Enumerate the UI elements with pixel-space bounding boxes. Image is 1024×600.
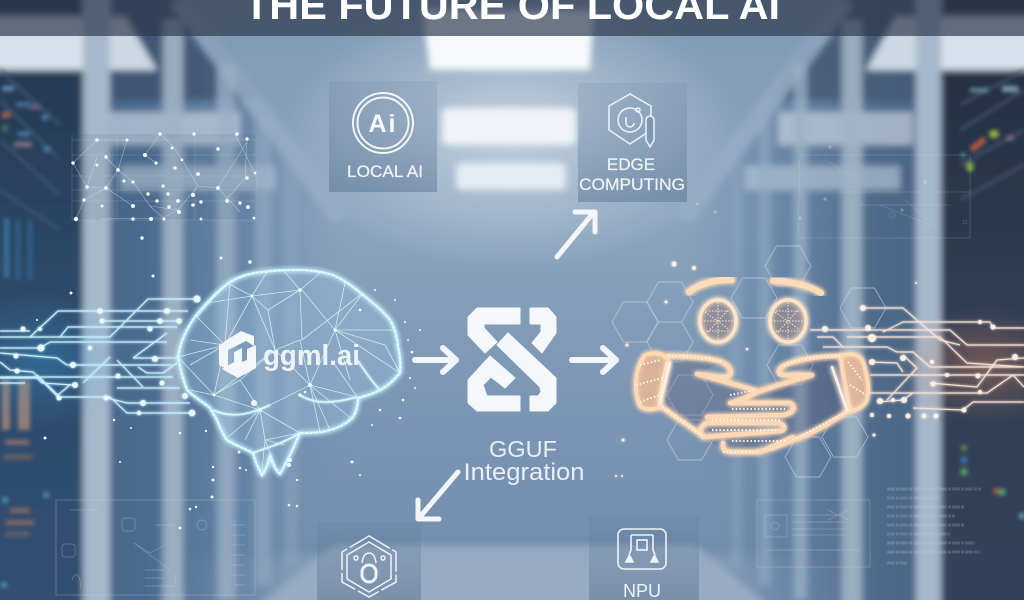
hexagon network behind hands (612, 246, 886, 477)
label: Local AI: LOCAL AI (347, 162, 423, 181)
label: Edge Computing: EDGE (607, 155, 655, 174)
title band (0, 0, 1024, 36)
panel: NPU (589, 515, 699, 600)
label: GGUF Integration: GGUF (489, 436, 557, 462)
label: Edge Computing: COMPUTING (579, 175, 685, 194)
brain network graphic (36, 256, 421, 530)
eyebrows (689, 280, 821, 293)
eye mesh (701, 302, 805, 340)
logo: ggml.ai mark (219, 331, 256, 378)
panel: Local AI (329, 81, 437, 192)
left circuit nodes (14, 296, 200, 416)
right circuit traces (810, 308, 1024, 410)
icon: Ai circle: Ai (368, 110, 398, 138)
eyes (700, 300, 806, 342)
faint network panel top right (696, 146, 970, 238)
arrow: GGUF to bottom-left panel (418, 472, 458, 519)
brain dotted rim (178, 270, 400, 475)
brain particles (36, 256, 421, 530)
faint dashboard panels bottom (56, 489, 981, 595)
brain outline (178, 270, 400, 475)
right circuit nodes (615, 262, 1018, 477)
arrow: GGUF to Edge Computing (557, 212, 595, 257)
panel: Edge Computing (578, 83, 687, 202)
hand particle texture (636, 356, 866, 452)
GGUF logo (468, 308, 556, 411)
label: GGUF Integration: Integration (464, 459, 584, 486)
arrow: brain to GGUF (415, 348, 456, 372)
arrow: GGUF to Llama hands (572, 348, 616, 372)
icon: edge hexagon with pen (609, 94, 654, 147)
brain mesh (178, 272, 400, 470)
network panel top left (71, 132, 256, 240)
handshake and face graphic (636, 280, 868, 452)
icon: hexagon with lock (342, 536, 396, 597)
hand outlines (660, 356, 850, 452)
hand cuffs (636, 353, 868, 411)
label: ggml.ai: ggml.ai (263, 340, 360, 372)
left circuit traces (0, 299, 197, 413)
brain lobe curves (213, 360, 380, 453)
hands interior shade (662, 356, 848, 452)
icon: NPU chip (618, 529, 666, 569)
panel: bottom-left hex icon (317, 522, 421, 600)
